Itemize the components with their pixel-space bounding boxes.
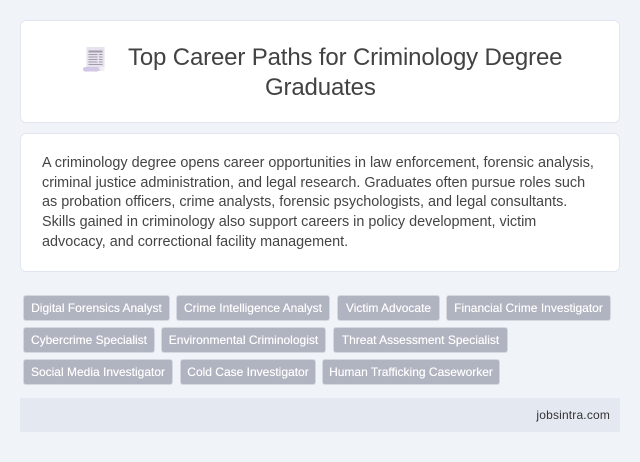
tag [23, 295, 170, 321]
tag: Environmental Criminologist [169, 333, 318, 347]
tag [180, 359, 316, 385]
tag [322, 359, 500, 385]
tag: Financial Crime Investigator [454, 301, 603, 315]
tag: Social Media Investigator [31, 365, 165, 379]
text block: description: as probation officers, crime analysts, forensic psychologists, and legal consultants. [42, 194, 567, 210]
text block: description [42, 155, 594, 250]
text block: description: Skills gained in criminology also support careers in policy development, victim [42, 214, 536, 230]
tag: Victim Advocate [346, 301, 431, 315]
tag [337, 295, 440, 321]
title: Top Career Paths for Criminology Degree [128, 44, 562, 71]
tag [446, 295, 611, 321]
panel: header [20, 20, 620, 123]
tag: Cold Case Investigator [187, 365, 309, 379]
text block: description: criminal justice administration, and legal research. Graduates often pursue roles such [42, 175, 585, 191]
panel: description [20, 133, 620, 272]
title [128, 44, 562, 101]
title: Graduates [265, 74, 376, 101]
tag [333, 327, 508, 353]
text block: description: A criminology degree opens career opportunities in law enforcement, forensic analysis, [42, 155, 594, 171]
footer text: jobsintra.com [536, 408, 610, 422]
tag: Crime Intelligence Analyst [184, 301, 322, 315]
tag [23, 359, 173, 385]
tag: Digital Forensics Analyst [31, 301, 162, 315]
tag [161, 327, 326, 353]
tag: Threat Assessment Specialist [342, 333, 499, 347]
tag: Human Trafficking Caseworker [329, 365, 493, 379]
icon: document scroll [83, 47, 104, 72]
tag [23, 327, 155, 353]
tags: career paths [23, 295, 611, 385]
text block: description: advocacy, and correctional facility management. [42, 234, 348, 250]
tag [176, 295, 330, 321]
footer [20, 398, 620, 432]
tag: Cybercrime Specialist [31, 333, 147, 347]
